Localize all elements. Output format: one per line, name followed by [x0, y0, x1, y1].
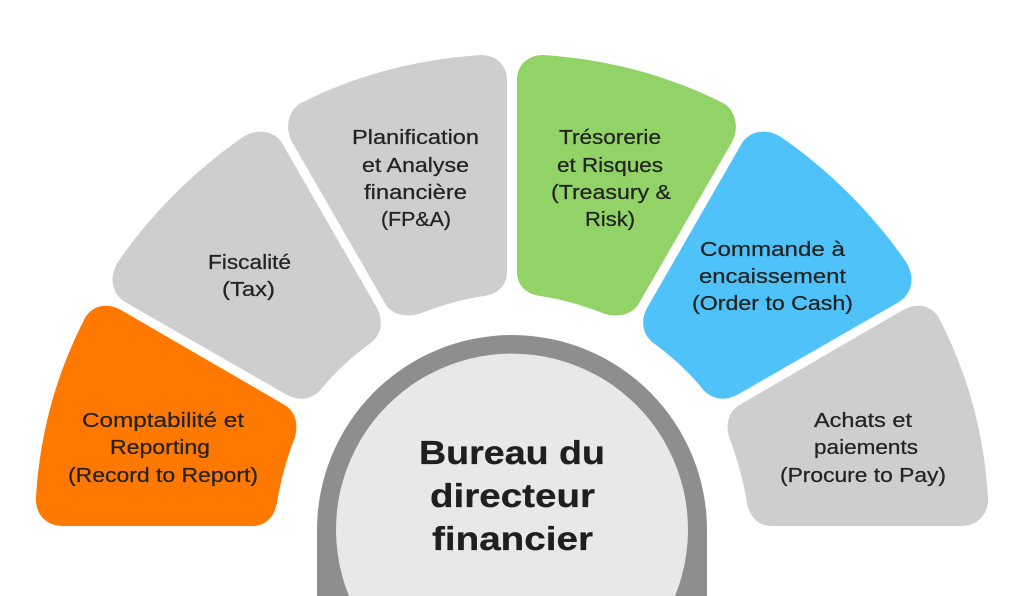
- label: Comptabilité et: [82, 410, 245, 432]
- segment: Commande à encaissement: [643, 132, 911, 399]
- label: [692, 239, 853, 315]
- label: Risk): [585, 209, 635, 231]
- label: paiements: [814, 437, 918, 459]
- segment: Achats et paiements: [728, 306, 988, 526]
- label: (Tax): [222, 279, 275, 301]
- title: [419, 434, 605, 557]
- label: et Risques: [557, 155, 663, 177]
- label: Reporting: [110, 437, 210, 459]
- outer ring: [317, 335, 707, 596]
- label: (Treasury &: [551, 182, 672, 204]
- label: Trésorerie: [559, 127, 661, 149]
- title: financier: [432, 520, 593, 557]
- label: Achats et: [814, 410, 913, 432]
- label: financière: [364, 182, 467, 204]
- label: encaissement: [699, 266, 847, 288]
- segment: Trésorerie et Risques: [517, 55, 736, 316]
- label: [352, 127, 479, 231]
- title: Bureau du: [419, 434, 605, 471]
- segment: Comptabilité et Reporting: [36, 306, 296, 526]
- title: directeur: [430, 477, 595, 514]
- label: [551, 127, 672, 231]
- label: et Analyse: [362, 155, 469, 177]
- label: Commande à: [700, 239, 846, 261]
- segment: Planification et Analyse financière: [288, 55, 507, 316]
- label: [208, 252, 291, 301]
- inner circle: [336, 354, 688, 596]
- label: [780, 410, 946, 487]
- label: Planification: [352, 127, 479, 149]
- label: [68, 410, 258, 487]
- segment: Fiscalité: [113, 132, 381, 399]
- central hub: Bureau du directeur financier: [317, 335, 707, 596]
- label: (Procure to Pay): [780, 465, 946, 487]
- label: (FP&A): [381, 209, 451, 231]
- label: Fiscalité: [208, 252, 291, 274]
- label: (Order to Cash): [692, 293, 853, 315]
- label: (Record to Report): [68, 465, 258, 487]
